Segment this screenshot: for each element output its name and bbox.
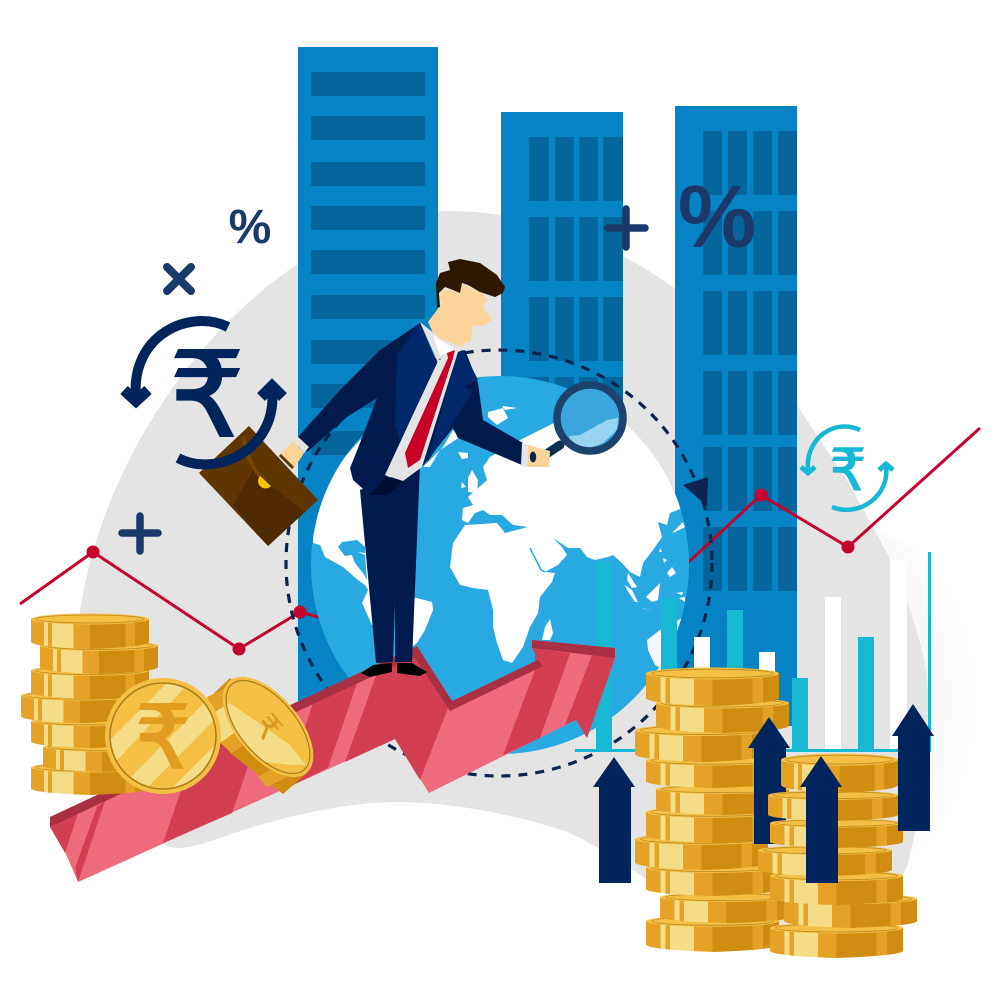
- icon: multiply sign: [167, 267, 191, 291]
- chest highlight: [395, 323, 437, 442]
- arrow up second: [748, 717, 790, 844]
- big red growth arrow: [50, 640, 615, 882]
- arrow up first: [593, 757, 635, 883]
- left hand: [279, 441, 304, 470]
- tilted coin: [207, 676, 314, 794]
- coin stack right back: [635, 668, 793, 952]
- jacket left: [297, 323, 437, 495]
- large front rupee coin: [105, 678, 222, 795]
- white collar: [433, 335, 455, 356]
- icon: navy rupee with cycle arrows: [124, 321, 283, 464]
- dashed orbit ring: [286, 350, 712, 776]
- coin stack right front: [758, 754, 917, 958]
- shoes: [361, 663, 427, 677]
- globe: [311, 376, 695, 754]
- jacket pocket shadow: [370, 477, 403, 495]
- neck: [428, 310, 472, 347]
- icon: navy rupee with cycle arrows: ₹: [169, 330, 245, 462]
- coin stack left: [21, 614, 161, 795]
- building left: [298, 47, 438, 707]
- icon: small percent: %: [229, 201, 271, 254]
- right lapel: [427, 350, 478, 463]
- continents: [313, 405, 695, 670]
- ear: [440, 290, 454, 304]
- building right: [675, 106, 797, 726]
- arrow up third: [800, 756, 842, 883]
- icon: teal rupee with cycle arrows: ₹: [830, 438, 866, 503]
- tilted coin rupee: ₹: [246, 707, 289, 748]
- right hand: [528, 445, 550, 467]
- red line graph: [20, 428, 980, 656]
- shirt cuff left: [293, 436, 309, 453]
- jacket right and arm: [422, 350, 523, 467]
- magnifying glass: [545, 385, 623, 455]
- face: [437, 283, 492, 343]
- shirt: [385, 352, 458, 481]
- building middle: [501, 112, 623, 417]
- icon: plus right: [608, 209, 645, 247]
- arrow up fourth: [892, 704, 934, 831]
- trousers: [360, 465, 420, 663]
- icon: large percent: %: [678, 167, 756, 266]
- teal and white bar chart: [575, 552, 931, 752]
- icon: teal rupee with cycle arrows: [801, 426, 893, 510]
- businessman: [279, 259, 550, 677]
- orbit arrowhead: [683, 477, 708, 506]
- icon: plus left: [122, 516, 158, 551]
- shirt collar: [420, 322, 458, 363]
- necktie: [405, 350, 455, 468]
- hair: [436, 259, 505, 308]
- grip shadow: [530, 452, 536, 462]
- briefcase: [199, 426, 318, 546]
- grey background blob: [76, 211, 928, 950]
- shirt cuff right: [521, 443, 528, 467]
- pale halo behind chart: [745, 530, 975, 870]
- coin rupee symbol: ₹: [135, 688, 191, 787]
